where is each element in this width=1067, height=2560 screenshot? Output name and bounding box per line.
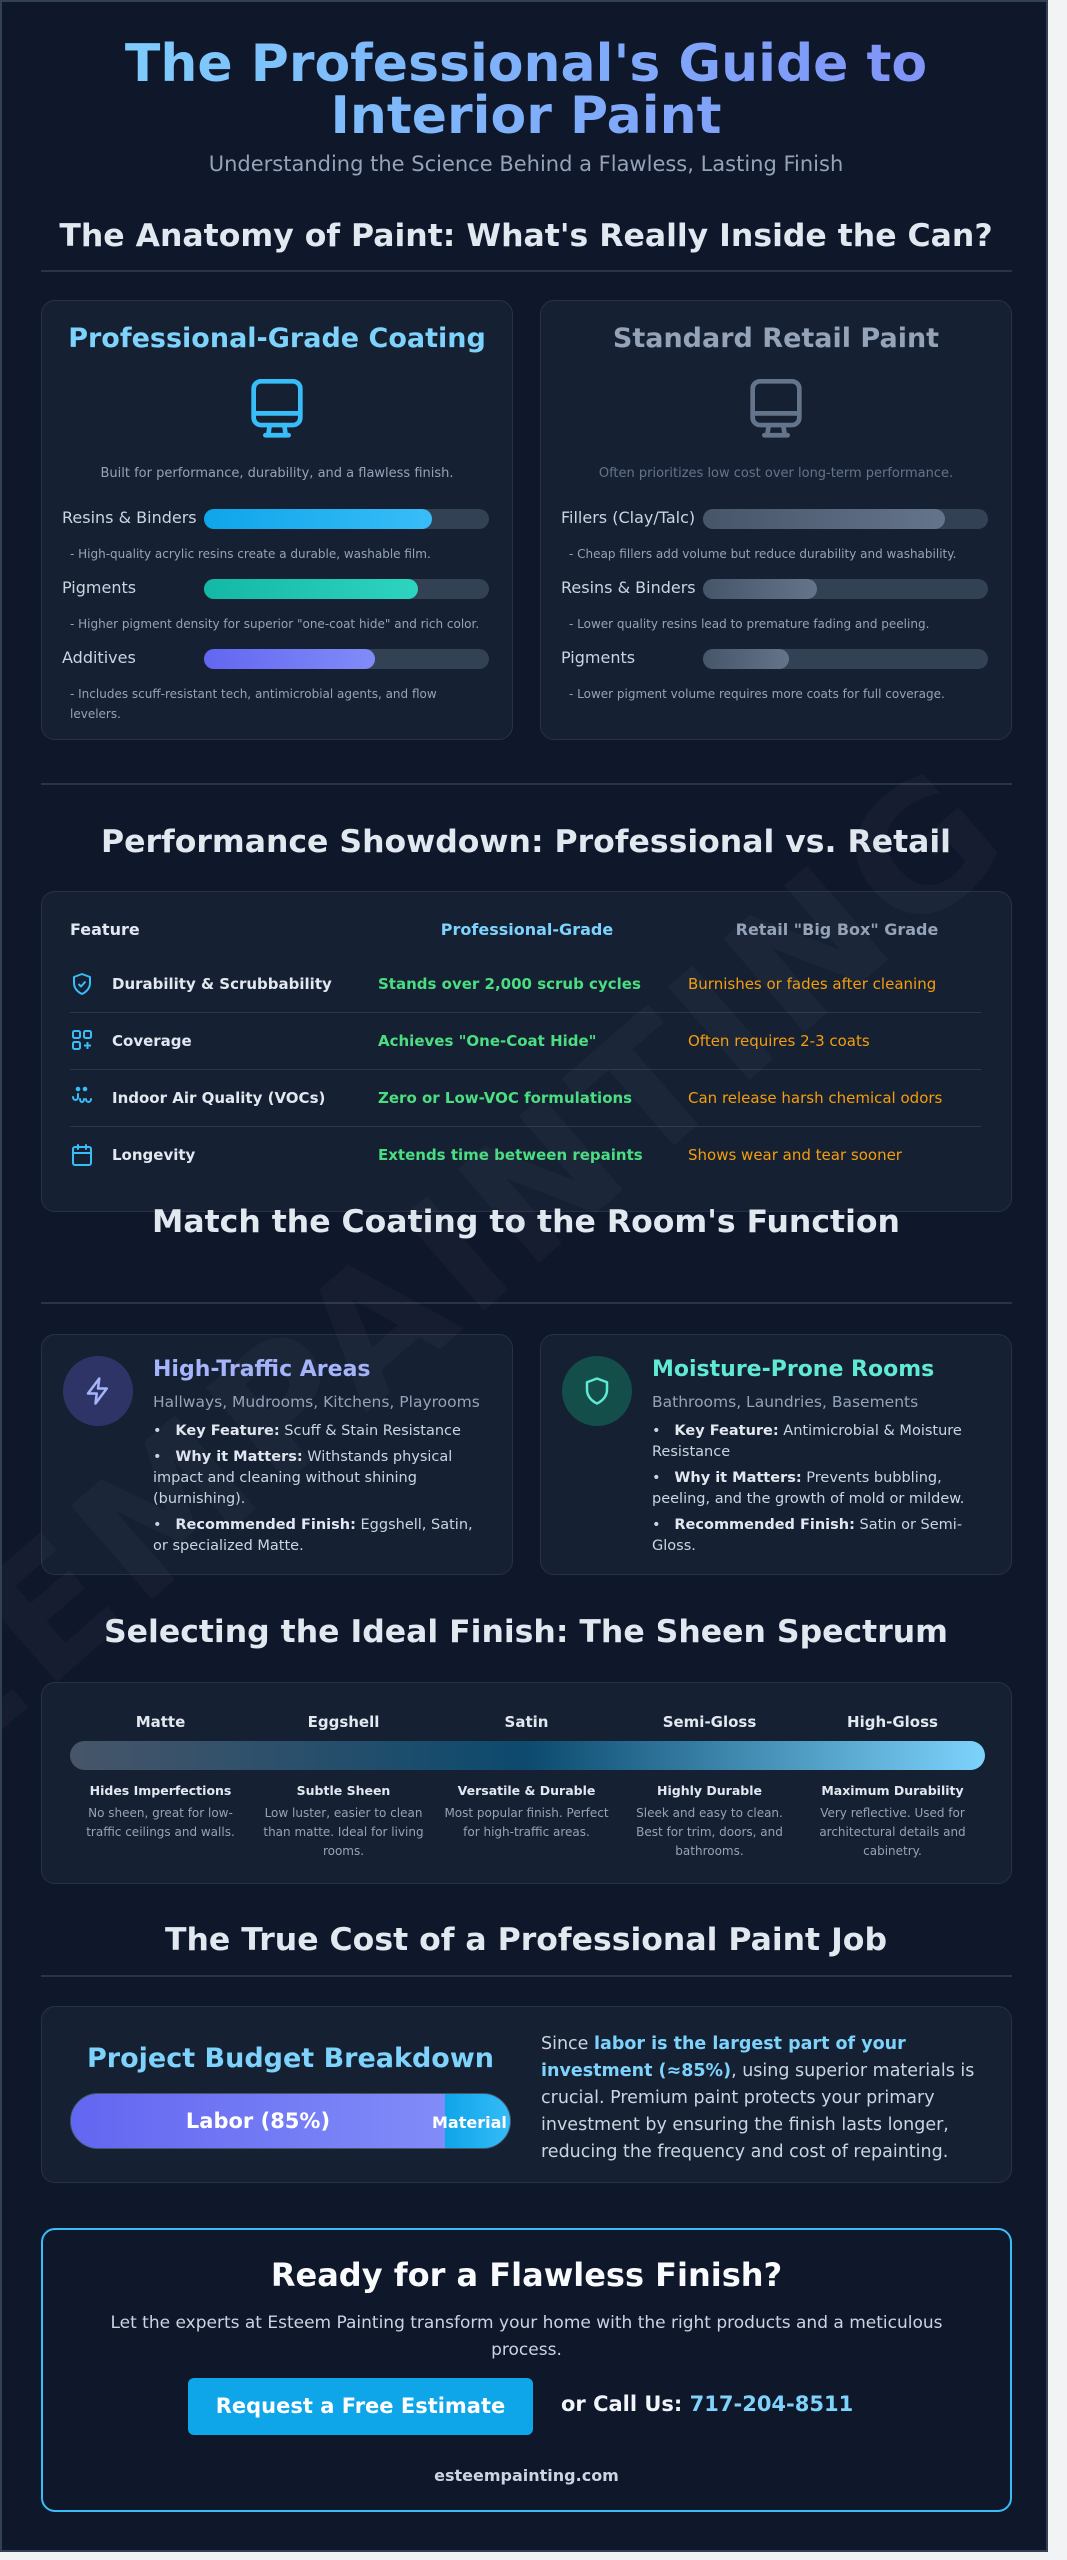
budget explanation: Since labor is the largest part of your investment (≈85%), using superior materials is crucial. Premium paint protects your primary investment by ensuring the finish lasts longer, reducing the frequency and cost of repainting. bbox=[541, 2034, 974, 2162]
sheen labels bbox=[136, 1713, 938, 1731]
row: coverage bbox=[70, 1014, 981, 1070]
title: The Professional's Guide to bbox=[125, 34, 927, 94]
bullets: • Key Feature: Scuff & Stain Resistance bbox=[153, 1423, 461, 1439]
sheen descriptions: Low luster, easier to clean than matte. Ideal for living rooms. bbox=[263, 1806, 424, 1858]
heading: room function: Match the Coating to the Room's Function bbox=[152, 1204, 900, 1240]
row: longevity bbox=[72, 1144, 902, 1166]
bullets: • Why it Matters: Prevents bubbling, peeling, and the growth of mold or mildew. bbox=[652, 1470, 964, 1507]
card title: Professional-Grade Coating bbox=[68, 323, 486, 354]
subtitle: Understanding the Science Behind a Flawless, Lasting Finish bbox=[209, 152, 843, 176]
panel: comparison table bbox=[41, 891, 1012, 1212]
sheen labels: High-Gloss bbox=[847, 1713, 938, 1731]
sheen labels: Eggshell bbox=[308, 1713, 379, 1731]
panel: budget bbox=[41, 2006, 1012, 2183]
row: longevity: Extends time between repaints bbox=[378, 1146, 643, 1164]
sheen labels: Semi-Gloss bbox=[663, 1713, 756, 1731]
website: esteempainting.com bbox=[434, 2466, 619, 2485]
sheen descriptions: Subtle Sheen bbox=[297, 1783, 390, 1798]
description: Often prioritizes low cost over long-term performance. bbox=[599, 466, 953, 481]
budget bar: Material bbox=[432, 2113, 507, 2132]
sheen labels: Satin bbox=[505, 1713, 548, 1731]
bullets: • Why it Matters: Withstands physical impact and cleaning without shining (burnishing). bbox=[153, 1449, 452, 1507]
sheen descriptions: Highly Durable bbox=[657, 1783, 762, 1798]
row: durability: Burnishes or fades after cleaning bbox=[688, 975, 936, 993]
bar: fillers bbox=[561, 508, 988, 529]
panel: retail paint: - Cheap fillers add volume but reduce durability and washability. bbox=[569, 547, 956, 561]
gradient bar bbox=[70, 1741, 985, 1770]
button bbox=[188, 2378, 533, 2435]
sheen descriptions: Versatile & Durable bbox=[458, 1783, 595, 1798]
sheen descriptions: No sheen, great for low-traffic ceilings and walls. bbox=[86, 1806, 235, 1839]
subtitle: Hallways, Mudrooms, Kitchens, Playrooms bbox=[153, 1393, 480, 1411]
sheen descriptions: Most popular finish. Perfect for high-traffic areas. bbox=[444, 1806, 609, 1839]
row: longevity: Longevity bbox=[112, 1146, 195, 1164]
budget bar bbox=[70, 2093, 511, 2149]
sheen descriptions: Very reflective. Used for architectural details and cabinetry. bbox=[819, 1806, 966, 1858]
bar: resins: Resins & Binders bbox=[62, 508, 197, 527]
sheen descriptions: Maximum Durability bbox=[821, 1783, 964, 1798]
heading: anatomy: The Anatomy of Paint: What's Really Inside the Can? bbox=[59, 218, 993, 254]
bar: resins: Resins & Binders bbox=[561, 578, 696, 597]
row: longevity: Shows wear and tear sooner bbox=[688, 1146, 902, 1164]
row: coverage: Coverage bbox=[112, 1032, 192, 1050]
row: air quality: Can release harsh chemical odors bbox=[688, 1089, 942, 1107]
row: air quality: Indoor Air Quality (VOCs) bbox=[112, 1089, 325, 1107]
card title: Standard Retail Paint bbox=[613, 323, 939, 354]
panel: high-traffic bbox=[41, 1334, 513, 1575]
bar: pigments bbox=[561, 648, 988, 669]
budget bar: Labor (85%) bbox=[186, 2109, 330, 2133]
sheen descriptions: Sleek and easy to clean. Best for trim, doors, and bathrooms. bbox=[636, 1806, 783, 1858]
heading: performance: Performance Showdown: Professional vs. Retail bbox=[101, 824, 951, 860]
bar: pigments: Pigments bbox=[561, 648, 635, 667]
heading: cost: The True Cost of a Professional Paint Job bbox=[165, 1922, 887, 1958]
row: durability bbox=[70, 957, 981, 1013]
heading: sheen: Selecting the Ideal Finish: The Sheen Spectrum bbox=[104, 1614, 948, 1650]
description: Built for performance, durability, and a flawless finish. bbox=[100, 466, 454, 481]
bullets bbox=[652, 1423, 964, 1554]
title: Moisture-Prone Rooms bbox=[652, 1357, 934, 1382]
bullets: • Recommended Finish: Eggshell, Satin, or specialized Matte. bbox=[153, 1517, 473, 1554]
sheen descriptions: Hides Imperfections bbox=[90, 1783, 231, 1798]
panel: professional coating: - High-quality acrylic resins create a durable, washable film. bbox=[70, 547, 431, 561]
bullets bbox=[153, 1423, 473, 1554]
row: air quality: Zero or Low-VOC formulations bbox=[378, 1089, 632, 1107]
bar: additives: Additives bbox=[62, 648, 136, 667]
sheen labels: Matte bbox=[136, 1713, 185, 1731]
title: High-Traffic Areas bbox=[153, 1357, 371, 1382]
row: durability: Stands over 2,000 scrub cycles bbox=[378, 975, 641, 993]
table header: Feature bbox=[70, 920, 140, 939]
bar: resins bbox=[62, 508, 489, 529]
cta text: Let the experts at Esteem Painting transform your home with the right products and a meticulous process. bbox=[110, 2313, 942, 2360]
panel: professional coating bbox=[41, 300, 513, 740]
cta heading: Ready for a Flawless Finish? bbox=[271, 2256, 782, 2294]
table header: Retail "Big Box" Grade bbox=[736, 920, 938, 939]
row: air quality bbox=[70, 1071, 981, 1127]
table header bbox=[70, 920, 938, 939]
panel: professional coating: - Higher pigment density for superior "one-coat hide" and rich color. bbox=[70, 617, 479, 631]
bar: additives bbox=[62, 648, 489, 669]
panel: retail paint bbox=[540, 300, 1012, 740]
subtitle: Bathrooms, Laundries, Basements bbox=[652, 1393, 918, 1411]
panel: sheen spectrum bbox=[41, 1682, 1012, 1884]
phone: or Call Us: 717-204-8511 bbox=[561, 2392, 853, 2416]
button: Request a Free Estimate bbox=[216, 2394, 505, 2418]
table header: Professional-Grade bbox=[441, 920, 613, 939]
row: durability: Durability & Scrubbability bbox=[112, 975, 332, 993]
icon: monitor bbox=[750, 379, 802, 438]
row: coverage: Achieves "One-Coat Hide" bbox=[378, 1032, 596, 1050]
bar: pigments bbox=[62, 578, 489, 599]
panel: moisture bbox=[540, 1334, 1012, 1575]
bullets: • Recommended Finish: Satin or Semi-Gloss. bbox=[652, 1517, 962, 1554]
title: Interior Paint bbox=[331, 86, 721, 146]
panel: call to action bbox=[41, 2228, 1012, 2512]
bar: fillers: Fillers (Clay/Talc) bbox=[561, 508, 695, 527]
bar: pigments: Pigments bbox=[62, 578, 136, 597]
icon: lightning bbox=[63, 1356, 133, 1426]
panel: retail paint: - Lower pigment volume requires more coats for full coverage. bbox=[569, 687, 945, 701]
title bbox=[22, 38, 1030, 142]
icon: monitor bbox=[251, 379, 303, 438]
bar: resins bbox=[561, 578, 988, 599]
budget title: Project Budget Breakdown bbox=[87, 2043, 494, 2074]
bullets: • Key Feature: Antimicrobial & Moisture Resistance bbox=[652, 1423, 962, 1460]
sheen descriptions bbox=[86, 1783, 966, 1858]
icon: shield bbox=[562, 1356, 632, 1426]
row: coverage: Often requires 2-3 coats bbox=[688, 1032, 870, 1050]
panel: retail paint: - Lower quality resins lead to premature fading and peeling. bbox=[569, 617, 929, 631]
panel: professional coating: - Includes scuff-resistant tech, antimicrobial agents, and flow levelers. bbox=[70, 687, 437, 721]
